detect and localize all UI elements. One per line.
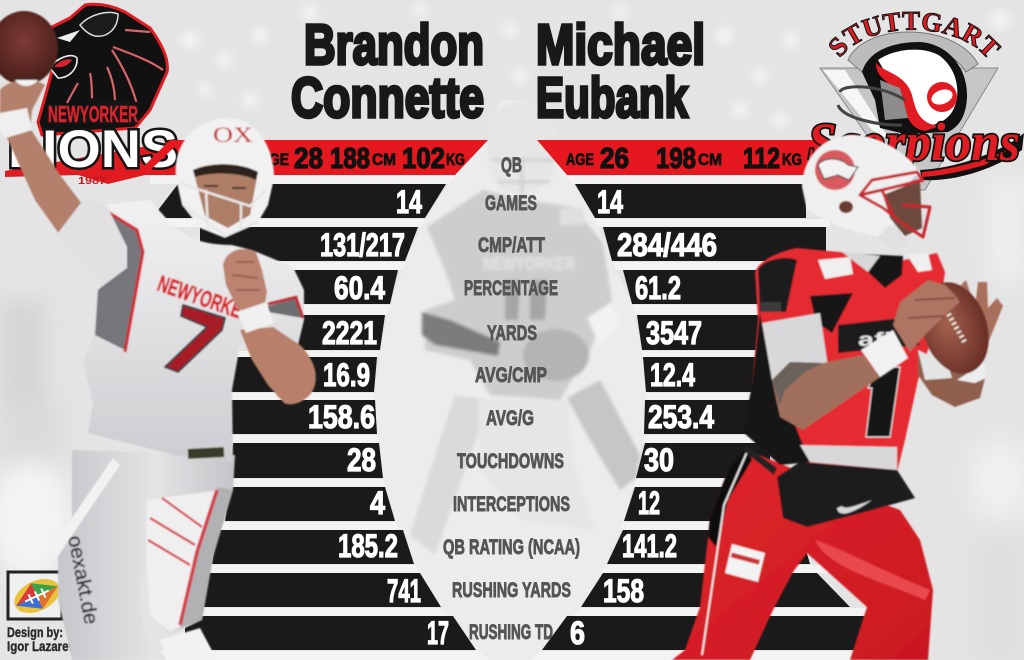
pants side panel: [146, 490, 220, 632]
jersey: [83, 200, 304, 462]
pants patch: [725, 544, 765, 582]
left forearm: [772, 355, 880, 430]
bio text: Connette: 102: [402, 143, 445, 175]
stat values: Eubank: 284/446: [617, 227, 717, 263]
ball lace patch: [15, 80, 38, 86]
stat values: Eubank: 253.4: [648, 399, 714, 435]
title: Brandon Connette: Connette: [291, 66, 484, 130]
stat labels: [443, 154, 580, 644]
helmet: [176, 118, 274, 238]
back fingers: [958, 280, 1003, 343]
bio text: Eubank: 112: [743, 143, 780, 175]
stat labels: QB: [501, 154, 522, 177]
stat labels: CMP/ATT: [478, 234, 545, 257]
pants: [58, 450, 235, 660]
red band left: Connette bio: [145, 140, 488, 175]
stat values: Connette: 28: [347, 442, 376, 478]
logo: New Yorker Lions: 1987: [78, 176, 107, 187]
stripes between stat bars: [150, 176, 880, 660]
wordmark Scorpions: Scorpions: [808, 112, 1020, 172]
bio text: Connette: AGE: [259, 150, 289, 169]
title: Michael Eubank: Eubank: [536, 66, 688, 130]
pants: [672, 450, 933, 660]
bio text: Eubank: KG: [782, 150, 802, 169]
stat values: Connette: 2221: [322, 315, 377, 351]
designer credit: Igor Lazarev: [7, 638, 75, 654]
stat values: Connette: 16.9: [323, 357, 370, 393]
stat values: Connette: 158.6: [308, 399, 375, 435]
chin strap: [877, 225, 908, 250]
jersey wordmark: NEWYORKER: [154, 270, 256, 327]
player: Michael Eubank, red uniform: afi: [858, 330, 892, 351]
jersey: [745, 248, 945, 472]
hand: [893, 280, 960, 352]
stat labels: GAMES: [485, 192, 537, 215]
stat values: Eubank: 61.2: [635, 270, 681, 306]
stat values: Eubank: 12: [638, 485, 660, 521]
player: Brandon Connette, white uniform: OX: [213, 122, 253, 147]
grey arch: [848, 32, 978, 72]
logo: New Yorker Lions: NEWYORKER: [48, 101, 138, 127]
designer credit: [7, 624, 75, 654]
sock: [160, 628, 217, 660]
stat values: Eubank: 30: [644, 442, 674, 478]
jersey side panel: [95, 214, 143, 350]
helmet: [862, 42, 967, 134]
bio text: Eubank: [566, 143, 802, 175]
red swoosh: [5, 140, 182, 184]
belt pouch: [777, 462, 915, 527]
stat values: Connette: 60.4: [334, 270, 385, 306]
stat labels: AVG/G: [486, 407, 534, 430]
stat values: Eubank: 3547: [646, 315, 702, 351]
helmet face mask: [860, 172, 930, 237]
title: Michael Eubank: [536, 13, 705, 130]
black stat bars: right player: [542, 184, 868, 650]
waist strap: [50, 458, 120, 556]
sleeve: [762, 313, 828, 380]
logo: New Yorker Lions: [5, 4, 182, 187]
right wrist band: [237, 302, 274, 333]
football thrown: [0, 11, 58, 85]
stat values: Eubank: 158: [603, 573, 644, 609]
title: Michael Eubank: Michael: [536, 13, 705, 77]
wordmark Lions: LIONS: [8, 120, 178, 179]
throwing arm: [0, 80, 90, 238]
logo: Stuttgart Scorpions: [807, 12, 1024, 190]
stat values: Eubank: 12.4: [650, 357, 695, 393]
designer logo box: [8, 572, 65, 620]
nike swoosh: [837, 500, 872, 514]
stat values: Connette: [308, 184, 449, 651]
stat labels: RUSHING YARDS: [452, 579, 571, 602]
right arm: [240, 327, 316, 404]
player: Brandon Connette, white uniform: [0, 11, 316, 660]
lion mane: [38, 4, 167, 135]
black side panel: [743, 313, 810, 465]
face mask: [181, 183, 266, 236]
center oval panel with faded player: [374, 100, 646, 660]
face: [883, 180, 922, 236]
thigh highlight: [815, 540, 930, 600]
bio text: Connette: 28: [294, 143, 323, 175]
bio text: Connette: 188: [330, 143, 370, 175]
title: Brandon Connette: Brandon: [304, 13, 484, 77]
swoosh: [920, 133, 1024, 180]
bio text: Eubank: 26: [600, 143, 629, 175]
stat labels: QB RATING (NCAA): [443, 536, 580, 559]
stat values: Connette: 741: [387, 573, 421, 609]
fist: [223, 249, 267, 310]
bio text: Connette: CM: [372, 150, 396, 169]
stat values: Connette: 4: [370, 485, 385, 521]
stat labels: INTERCEPTIONS: [453, 493, 570, 516]
jersey number 1: [866, 367, 900, 437]
triangle: [820, 68, 998, 190]
black side stripe: [708, 447, 752, 547]
bio text: Eubank: CM: [698, 150, 722, 169]
center oval panel with faded player: NEWYORKER: [483, 254, 575, 274]
sleeve: [55, 200, 127, 288]
mane strands: [67, 30, 163, 110]
black stat bars: left player: [152, 184, 476, 650]
pants red stripes: [148, 490, 217, 625]
stat labels: PERCENTAGE: [464, 277, 558, 300]
sponsor text: oexakt.de: [63, 534, 102, 626]
bio text: Connette: [259, 143, 465, 175]
designer credit: Design by:: [7, 624, 63, 640]
stat labels: AVG/CMP: [475, 364, 547, 387]
wrist band: [0, 108, 32, 138]
stat values: Connette: 17: [427, 615, 449, 651]
stat values: Eubank: 141.2: [622, 528, 677, 564]
stat values: Eubank: [570, 184, 717, 651]
shoulder pad: [758, 258, 797, 312]
wrist band: [861, 330, 908, 377]
helmet: [802, 135, 920, 250]
red band right: Eubank bio: [537, 140, 830, 175]
bio text: Connette: KG: [446, 150, 465, 169]
title: Brandon Connette: [291, 13, 484, 130]
helmet scorpion emblem: [815, 150, 855, 190]
bio text: Eubank: AGE: [566, 150, 594, 169]
arc text Stuttgart: STUTTGART: [829, 12, 1002, 58]
face: [193, 164, 258, 228]
right sleeve stripe: [268, 298, 302, 318]
stat values: Eubank: 6: [570, 615, 585, 651]
back arm: [918, 352, 985, 407]
jersey patches: [818, 257, 853, 279]
player: Michael Eubank, red uniform: [672, 135, 1003, 660]
stat values: Connette: 185.2: [338, 528, 398, 564]
lion head details: [80, 12, 118, 36]
stat labels: TOUCHDOWNS: [457, 450, 564, 473]
football: [910, 273, 1000, 383]
jersey number 7: [165, 305, 225, 372]
stat labels: RUSHING TD: [469, 621, 553, 644]
wordmark NewYorker: [47, 98, 140, 124]
collar: [860, 254, 903, 288]
stat values: Eubank: 14: [597, 184, 623, 220]
stat values: Connette: 131/217: [320, 227, 405, 263]
stat values: Connette: 14: [396, 184, 422, 220]
stat labels: YARDS: [487, 322, 537, 345]
bio text: Eubank: 198: [656, 143, 696, 175]
